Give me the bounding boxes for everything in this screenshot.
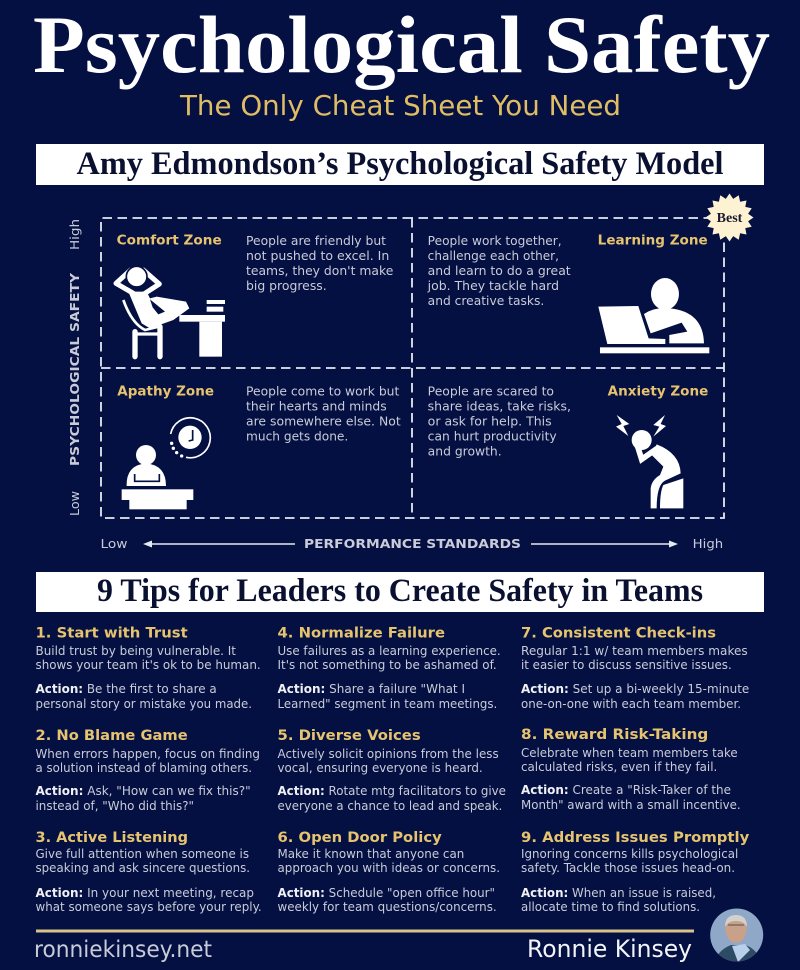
tip 9: Ignoring concerns kills psychological bbox=[521, 847, 738, 861]
tip 1: shows your team it's ok to be human. bbox=[36, 658, 261, 672]
tip 6: Action: Schedule "open office hour" bbox=[278, 886, 495, 900]
tip 5: everyone a chance to lead and speak. bbox=[278, 799, 502, 813]
icon: relaxing person at desk bbox=[116, 266, 225, 357]
panel: apathy zone: are somewhere else. Not bbox=[246, 415, 401, 429]
tip 2: instead of, "Who did this?" bbox=[36, 799, 194, 813]
tip 9: Action: When an issue is raised, bbox=[521, 886, 716, 900]
panel: comfort zone bbox=[116, 233, 393, 357]
panel: anxiety zone: and growth. bbox=[428, 445, 502, 459]
title: Psychological Safety bbox=[33, 0, 770, 90]
tip 7: it easier to discuss sensitive issues. bbox=[521, 658, 732, 672]
author name: Ronnie Kinsey bbox=[527, 935, 692, 963]
tip 8: Month" award with a small incentive. bbox=[521, 798, 741, 812]
best badge bbox=[706, 194, 754, 242]
panel: learning zone: People work together, bbox=[428, 234, 562, 248]
tip 7: 7. Consistent Check-ins bbox=[521, 626, 716, 642]
tip 9 bbox=[521, 830, 749, 914]
tip 6: 6. Open Door Policy bbox=[278, 830, 442, 846]
footer rule bbox=[36, 930, 694, 932]
panel: learning zone bbox=[427, 233, 709, 353]
tip 1 bbox=[36, 626, 261, 711]
tip 8: Action: Create a "Risk-Taker of the bbox=[521, 783, 731, 797]
tip 5: vocal, ensuring everyone is heard. bbox=[278, 761, 483, 775]
panel: anxiety zone: People are scared to bbox=[428, 385, 554, 399]
tip 5: Action: Rotate mtg facilitators to give bbox=[278, 784, 506, 798]
panel: anxiety zone: or ask for help. This bbox=[428, 415, 552, 429]
tip 4: It's not something to be ashamed of. bbox=[278, 658, 497, 672]
tip 1: 1. Start with Trust bbox=[36, 626, 188, 642]
tip 2: 2. No Blame Game bbox=[36, 728, 188, 744]
tip 2 bbox=[36, 728, 260, 813]
panel: anxiety zone bbox=[428, 385, 708, 508]
panel: anxiety zone: Anxiety Zone bbox=[608, 385, 708, 400]
tip 3: Action: In your next meeting, recap bbox=[36, 886, 254, 900]
tips banner: 9 Tips for Leaders to Create Safety in Teams bbox=[97, 573, 703, 609]
tip 9: safety. Tackle those issues head-on. bbox=[521, 861, 735, 875]
x axis: performance standards: High bbox=[693, 536, 723, 551]
tip 6: Make it known that anyone can bbox=[278, 847, 464, 861]
tip 4: Learned" segment in team meetings. bbox=[278, 697, 497, 711]
x axis: performance standards bbox=[100, 536, 723, 551]
quadrant grid bbox=[101, 218, 724, 518]
author photo bbox=[710, 908, 764, 965]
tip 4: Action: Share a failure "What I bbox=[278, 682, 465, 696]
best badge: Best bbox=[717, 211, 743, 226]
panel: comfort zone: Comfort Zone bbox=[117, 233, 222, 248]
panel: apathy zone bbox=[117, 385, 401, 509]
tip 4: Use failures as a learning experience. bbox=[278, 644, 501, 658]
tip 7: one-on-one with each team member. bbox=[521, 697, 741, 711]
tip 2: When errors happen, focus on finding bbox=[36, 747, 260, 761]
tip 8: calculated risks, even if they fail. bbox=[521, 760, 717, 774]
tip 5 bbox=[278, 728, 506, 813]
tip 8: 8. Reward Risk-Taking bbox=[521, 727, 708, 743]
panel: comfort zone: People are friendly but bbox=[246, 234, 386, 248]
panel: comfort zone: big progress. bbox=[246, 279, 327, 293]
tip 7: Regular 1:1 w/ team members makes bbox=[521, 644, 748, 658]
tip 1: personal story or mistake you made. bbox=[36, 697, 252, 711]
tip 9: allocate time to find solutions. bbox=[521, 900, 700, 914]
panel: learning zone: Learning Zone bbox=[598, 233, 708, 248]
tip 3: 3. Active Listening bbox=[36, 830, 188, 846]
tip 6: weekly for team questions/concerns. bbox=[278, 900, 497, 914]
y axis: psychological safety: PSYCHOLOGICAL SAFETY bbox=[67, 272, 82, 466]
y axis: psychological safety: Low bbox=[67, 491, 82, 516]
panel: apathy zone: People come to work but bbox=[246, 385, 400, 399]
tip 5: 5. Diverse Voices bbox=[278, 728, 421, 744]
tip 6: approach you with ideas or concerns. bbox=[278, 861, 500, 875]
icon: bored person with clock bbox=[122, 418, 210, 509]
tip 8: Celebrate when team members take bbox=[521, 746, 738, 760]
tip 7 bbox=[521, 626, 749, 711]
icon: person at laptop bbox=[598, 278, 709, 353]
panel: learning zone: job. They tackle hard bbox=[427, 279, 559, 293]
tip 1: Action: Be the first to share a bbox=[36, 682, 217, 696]
tip 9: 9. Address Issues Promptly bbox=[521, 830, 749, 846]
tip 3: what someone says before your reply. bbox=[36, 900, 262, 914]
tip 3 bbox=[36, 830, 262, 914]
panel: apathy zone: their hearts and minds bbox=[246, 400, 387, 414]
y axis: psychological safety: High bbox=[67, 219, 82, 250]
panel: anxiety zone: share ideas, take risks, bbox=[428, 400, 571, 414]
tip 4 bbox=[278, 626, 501, 711]
tip 5: Actively solicit opinions from the less bbox=[278, 747, 499, 761]
panel: apathy zone: much gets done. bbox=[246, 430, 348, 444]
tip 3: Give full attention when someone is bbox=[36, 847, 249, 861]
model banner: Amy Edmondson’s Psychological Safety Model bbox=[76, 146, 724, 182]
subtitle: The Only Cheat Sheet You Need bbox=[179, 89, 621, 122]
panel: apathy zone: Apathy Zone bbox=[117, 385, 214, 400]
x axis: performance standards: PERFORMANCE STANDARDS bbox=[304, 536, 521, 551]
panel: comfort zone: teams, they don't make bbox=[246, 264, 393, 278]
tip 7: Action: Set up a bi-weekly 15-minute bbox=[521, 682, 749, 696]
panel: comfort zone: not pushed to excel. In bbox=[246, 249, 389, 263]
tip 2: a solution instead of blaming others. bbox=[36, 761, 252, 775]
tip 2: Action: Ask, "How can we fix this?" bbox=[36, 784, 251, 798]
x axis: performance standards: Low bbox=[100, 536, 128, 551]
panel: learning zone: challenge each other, bbox=[428, 249, 559, 263]
panel: anxiety zone: can hurt productivity bbox=[428, 430, 557, 444]
panel: learning zone: and learn to do a great bbox=[428, 264, 571, 278]
tip 6 bbox=[278, 830, 500, 914]
icon: stressed person bbox=[616, 415, 683, 508]
website: ronniekinsey.net bbox=[34, 937, 212, 963]
tip 1: Build trust by being vulnerable. It bbox=[36, 644, 236, 658]
panel: learning zone: and creative tasks. bbox=[428, 294, 544, 308]
y axis: psychological safety bbox=[67, 219, 82, 516]
tip 3: speaking and ask sincere questions. bbox=[36, 861, 250, 875]
tip 8 bbox=[521, 727, 741, 812]
tip 4: 4. Normalize Failure bbox=[278, 626, 445, 642]
